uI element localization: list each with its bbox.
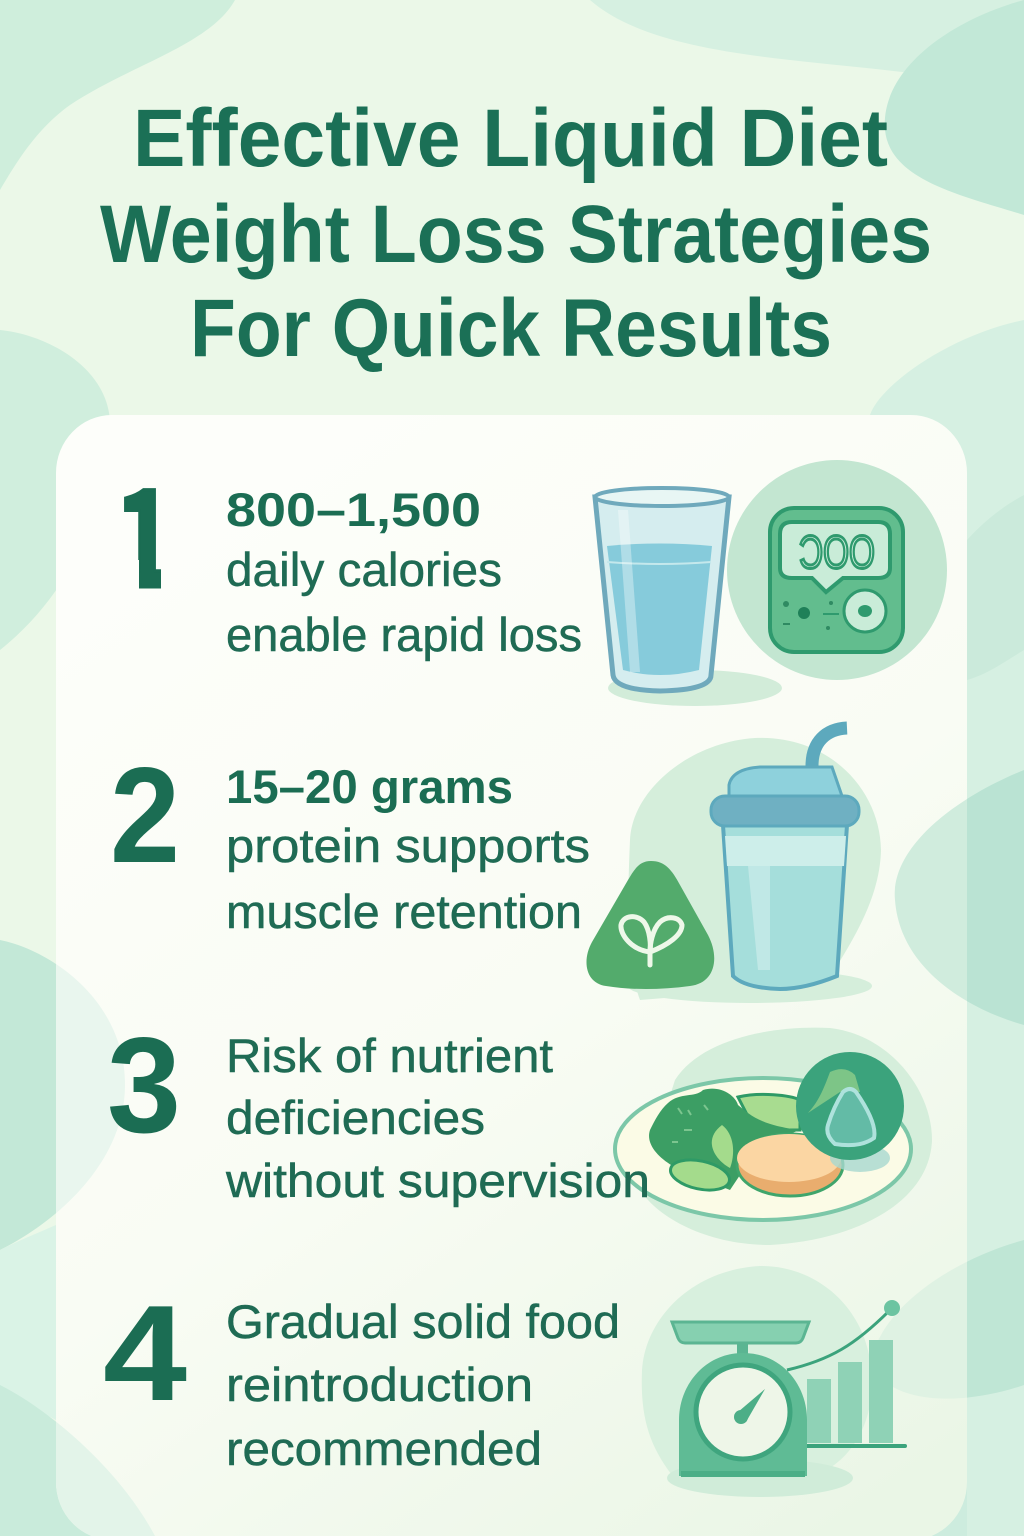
icon: kitchen scale and progress chart [642, 1266, 907, 1497]
blob [640, 1028, 932, 1245]
bars [807, 1340, 893, 1443]
icon: protein shaker and leaf badge [586, 728, 881, 1003]
step 1 number: 1 [114, 430, 176, 626]
plate [615, 1078, 911, 1220]
shadow [628, 969, 872, 1003]
axis [805, 1444, 907, 1448]
trend line [787, 1310, 890, 1370]
leaf slice [712, 1125, 733, 1168]
step 3 number: 3 [107, 1009, 181, 1161]
step 1 text [226, 483, 582, 661]
step 2 number: 2 [110, 739, 180, 891]
step 4 text [226, 1295, 620, 1475]
calorie counter device [770, 508, 903, 652]
cup body [723, 825, 847, 989]
lid top [729, 767, 842, 796]
shadow [667, 1459, 853, 1497]
cup upper light band [725, 836, 846, 866]
title [100, 93, 932, 374]
leaf behind [738, 1094, 800, 1130]
step 3 text [225, 1029, 650, 1207]
leaf badge [586, 861, 714, 989]
step 2 text: muscle retention [226, 885, 582, 938]
background circle [727, 460, 947, 680]
icon: plate of vegetables [615, 1028, 932, 1245]
background blob [628, 738, 881, 1000]
step 4 text: Gradual solid food [226, 1295, 620, 1348]
glass shadow [608, 670, 782, 706]
step 1 text: enable rapid loss [226, 608, 582, 661]
step 3 text: Risk of nutrient [226, 1029, 553, 1082]
card panel [56, 415, 967, 1536]
icon: water glass and calorie counter [595, 460, 947, 706]
title: Effective Liquid Diet [133, 93, 888, 184]
calorie counter device: ƆOO [799, 526, 875, 578]
step 2 text: protein supports [226, 819, 590, 872]
avocado circle [796, 1052, 904, 1172]
title: For Quick Results [190, 283, 832, 374]
step 4 text: reintroduction [226, 1358, 533, 1411]
title: Weight Loss Strategies [100, 189, 932, 280]
step 1 text: 800–1,500 [226, 483, 481, 536]
step 1 text: daily calories [226, 543, 502, 596]
step 2 text: 15–20 grams [226, 760, 513, 813]
step 3 text: deficiencies [226, 1091, 485, 1144]
step 4 text: recommended [226, 1422, 542, 1475]
orange slice [737, 1134, 843, 1196]
cucumber slice [668, 1155, 732, 1195]
water glass [595, 488, 729, 691]
blob [642, 1266, 872, 1485]
step 4 number: 4 [103, 1277, 187, 1429]
straw [812, 728, 847, 766]
step 3 text: without supervision [225, 1154, 650, 1207]
step 2 text [226, 760, 590, 938]
cup highlight [748, 866, 770, 970]
lid ring [711, 796, 859, 826]
card tints showing background shapes through [56, 799, 967, 1536]
scale [672, 1322, 809, 1477]
broccoli greens [649, 1089, 800, 1190]
